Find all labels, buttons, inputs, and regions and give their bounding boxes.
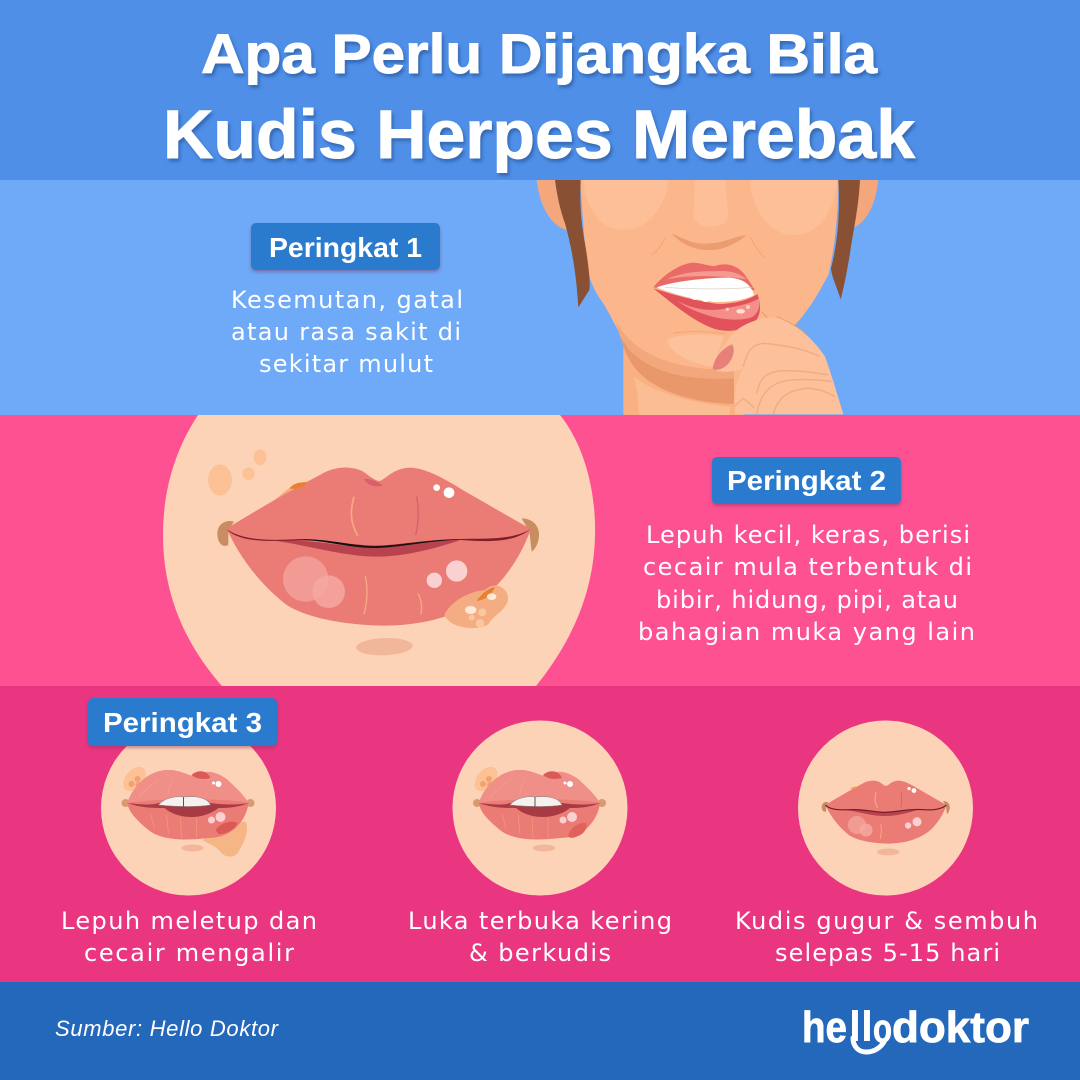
caption: open sore: & berkudis [469, 939, 611, 967]
nail [713, 344, 734, 370]
badge: Peringkat 3 [88, 698, 277, 746]
logo: hellodoktor: ll [849, 1003, 873, 1051]
logo: hellodoktor: doktor [892, 1003, 1029, 1052]
panel: header [0, 0, 1080, 180]
logo: hellodoktor [802, 1003, 1029, 1052]
badge: Peringkat 1 [251, 223, 440, 270]
illustration: face with cold sore [537, 180, 878, 415]
badge: Peringkat 2: Peringkat 2 [727, 465, 886, 496]
panel: stage 3 [0, 686, 1080, 982]
caption: burst blisters: Lepuh meletup dan [61, 907, 317, 935]
logo: hellodoktor: he [802, 1003, 847, 1052]
illustration: large lips with blisters [163, 415, 595, 686]
logo: hellodoktor: o [873, 1007, 892, 1051]
text: stage 1 description: Kesemutan, gatal [231, 286, 463, 314]
text: stage 2 description: bibir, hidung, pipi, atau [656, 586, 958, 614]
caption: burst blisters [61, 907, 317, 967]
text: stage 1 description: atau rasa sakit di [231, 318, 461, 346]
illustration: healed lips [798, 720, 973, 896]
badge: Peringkat 2 [712, 457, 901, 504]
text: stage 2 description: cecair mula terbentuk di [643, 553, 972, 581]
badge: Peringkat 3: Peringkat 3 [103, 707, 262, 738]
caption: healing [735, 907, 1038, 967]
caption: open sore: Luka terbuka kering [408, 907, 672, 935]
title line 2: Kudis Herpes Merebak [163, 96, 916, 173]
panel: stage 2 [0, 415, 1080, 686]
source credit: Sumber: Hello Doktor [55, 1016, 280, 1041]
panel: footer [0, 982, 1080, 1080]
teeth [657, 278, 754, 302]
hand [713, 317, 843, 414]
title line 1: Apa Perlu Dijangka Bila [201, 22, 878, 85]
caption: burst blisters: cecair mengalir [84, 939, 294, 967]
illustration: lips with burst blisters [101, 720, 276, 896]
panel: stage 1 [0, 180, 1080, 415]
text: stage 2 description: bahagian muka yang lain [638, 618, 975, 646]
caption: healing: Kudis gugur & sembuh [735, 907, 1038, 935]
text: stage 2 description: Lepuh kecil, keras, berisi [646, 521, 970, 549]
badge: Peringkat 1: Peringkat 1 [269, 232, 422, 263]
lower lip [653, 288, 760, 331]
caption: open sore [408, 907, 672, 967]
caption: healing: selepas 5-15 hari [775, 939, 1000, 967]
upper lip [653, 263, 755, 290]
text: stage 2 description [638, 521, 975, 646]
illustration: lips with open dry sore [452, 720, 628, 896]
text: stage 1 description [231, 286, 463, 378]
text: stage 1 description: sekitar mulut [259, 350, 433, 378]
